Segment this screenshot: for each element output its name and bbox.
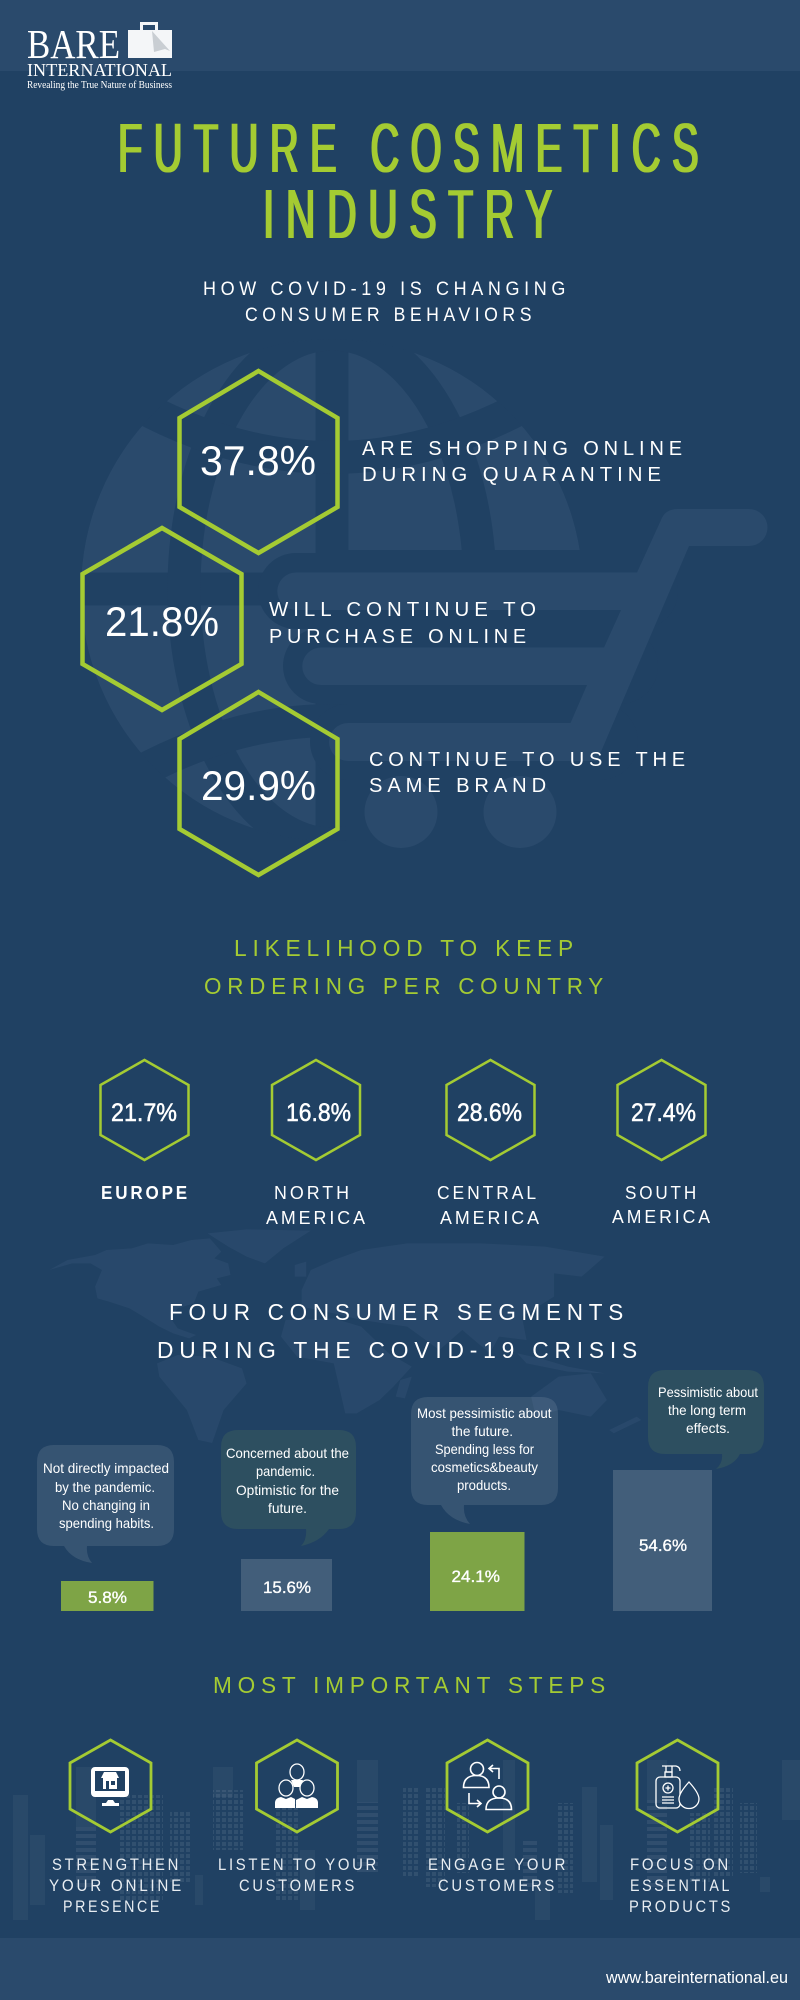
speech bubble: most pessimistic: Most pessimistic about	[417, 1405, 552, 1421]
step: listen to customers: CUSTOMERS	[239, 1877, 357, 1895]
bar: 5.8%: 5.8%	[88, 1588, 127, 1607]
hexagon: Central America: 28.6%	[457, 1099, 522, 1127]
heading: four consumer segments	[157, 1299, 643, 1363]
hexagon: South America	[618, 1060, 706, 1160]
step: engage customers	[428, 1740, 568, 1895]
speech bubble: concerned: Concerned about the	[226, 1445, 349, 1461]
speech bubble: concerned: Optimistic for the	[236, 1482, 339, 1498]
region labels	[101, 1183, 713, 1228]
logo: Revealing the True Nature of Business	[27, 80, 172, 91]
step: strengthen online presence: YOUR ONLINE	[49, 1877, 184, 1895]
speech bubble: pessimistic long term: effects.	[686, 1420, 730, 1436]
background: world map	[49, 1229, 641, 1443]
speech bubble: concerned: pandemic.	[256, 1463, 315, 1479]
speech bubble: pessimistic long term: the long term	[668, 1402, 746, 1418]
step: focus on essential products	[629, 1740, 733, 1916]
icon: sanitizer bottle and drop	[656, 1766, 699, 1808]
speech bubble: most pessimistic: products.	[457, 1477, 511, 1493]
hexagon stat: 29.9%	[180, 692, 338, 875]
speech bubble: pessimistic long term: Pessimistic about	[658, 1384, 758, 1400]
hexagon: Europe	[100, 1060, 188, 1160]
label: shopping online: ARE SHOPPING ONLINE	[362, 437, 687, 460]
hexagon stat: 37.8%	[180, 371, 338, 553]
subtitle: CONSUMER BEHAVIORS	[245, 304, 536, 326]
footer website: www.bareinternational.eu	[605, 1968, 788, 1987]
region labels: AMERICA	[440, 1208, 542, 1228]
speech bubble: not directly impacted: Not directly impacted	[43, 1460, 169, 1476]
label: same brand: CONTINUE TO USE THE	[369, 748, 690, 771]
step: listen to customers	[218, 1740, 379, 1895]
step: strengthen online presence	[49, 1740, 184, 1916]
label: same brand: SAME BRAND	[369, 774, 551, 797]
background: globe	[82, 352, 580, 828]
background: shopping cart	[277, 509, 768, 870]
logo	[27, 21, 172, 91]
footer band	[0, 1938, 800, 2000]
bar: 15.6%: 15.6%	[263, 1578, 311, 1597]
hexagon stat: 21.8%: 21.8%	[105, 598, 219, 645]
hexagon stat: 21.8%	[82, 528, 242, 710]
speech bubble: concerned: future.	[268, 1500, 307, 1516]
title	[118, 109, 710, 253]
step: engage customers: ENGAGE YOUR	[428, 1856, 568, 1874]
region labels: EUROPE	[101, 1183, 190, 1203]
region labels: AMERICA	[612, 1207, 713, 1227]
hexagon: North America: 16.8%	[286, 1099, 351, 1127]
heading: likelihood	[204, 935, 609, 999]
bar: 24.1%: 24.1%	[452, 1567, 500, 1586]
hexagon: South America: 27.4%	[631, 1099, 696, 1127]
bar: 5.8%	[61, 1581, 154, 1611]
heading: likelihood: LIKELIHOOD TO KEEP	[234, 935, 579, 961]
icon: monitor with store	[91, 1767, 129, 1806]
speech bubble: not directly impacted	[37, 1445, 174, 1563]
hexagon stat: 37.8%: 37.8%	[200, 437, 316, 484]
speech bubble: not directly impacted: No changing in	[62, 1497, 150, 1513]
step: strengthen online presence: STRENGTHEN	[52, 1856, 181, 1874]
region labels: NORTH	[274, 1183, 352, 1203]
speech bubble: most pessimistic: Spending less for	[435, 1441, 534, 1457]
label: shopping online: DURING QUARANTINE	[362, 463, 666, 486]
logo: BARE	[27, 21, 120, 67]
speech bubble: concerned	[221, 1430, 356, 1546]
speech bubble: pessimistic long term	[648, 1370, 764, 1469]
hexagon: Europe: 21.7%	[111, 1099, 177, 1127]
bar: 54.6%: 54.6%	[639, 1536, 687, 1555]
region labels: CENTRAL	[437, 1183, 539, 1203]
speech bubble: most pessimistic: cosmetics&beauty	[431, 1459, 538, 1475]
step: listen to customers: LISTEN TO YOUR	[218, 1856, 379, 1874]
hexagon: North America	[272, 1060, 360, 1160]
heading: four consumer segments: DURING THE COVID-19 CRISIS	[157, 1337, 643, 1363]
speech bubble: not directly impacted: spending habits.	[59, 1515, 154, 1531]
subtitle	[203, 278, 570, 326]
icon: exchanging people	[464, 1762, 512, 1810]
bar: 15.6%	[241, 1559, 332, 1611]
step: focus on essential products: FOCUS ON	[630, 1856, 731, 1874]
step: strengthen online presence: PRESENCE	[63, 1898, 162, 1916]
label: continue purchase	[269, 598, 541, 648]
title: INDUSTRY	[263, 175, 564, 253]
top band	[0, 0, 800, 71]
logo: INTERNATIONAL	[27, 60, 172, 80]
label: continue purchase: WILL CONTINUE TO	[269, 598, 541, 621]
label: continue purchase: PURCHASE ONLINE	[269, 625, 531, 648]
heading: likelihood: ORDERING PER COUNTRY	[204, 973, 609, 999]
hexagon: Central America	[446, 1060, 534, 1160]
speech bubble: most pessimistic: the future.	[452, 1423, 513, 1439]
speech bubble: not directly impacted: by the pandemic.	[55, 1479, 155, 1495]
hexagon stat: 29.9%: 29.9%	[201, 762, 316, 809]
speech bubble: most pessimistic	[411, 1397, 558, 1524]
label: shopping online	[362, 437, 687, 486]
step: focus on essential products: PRODUCTS	[629, 1898, 733, 1916]
bar: 24.1%	[430, 1532, 524, 1611]
step: engage customers: CUSTOMERS	[438, 1877, 557, 1895]
background: city skyline	[13, 1760, 800, 1920]
region labels: SOUTH	[625, 1183, 699, 1203]
heading: most important steps: MOST IMPORTANT STEPS	[213, 1672, 611, 1698]
bar: 54.6%	[613, 1470, 712, 1611]
region labels: AMERICA	[266, 1208, 368, 1228]
subtitle: HOW COVID-19 IS CHANGING	[203, 278, 570, 300]
label: same brand	[369, 748, 690, 797]
step: focus on essential products: ESSENTIAL	[630, 1877, 732, 1895]
icon: three people	[275, 1764, 318, 1808]
heading: four consumer segments: FOUR CONSUMER SEGMENTS	[169, 1299, 629, 1325]
